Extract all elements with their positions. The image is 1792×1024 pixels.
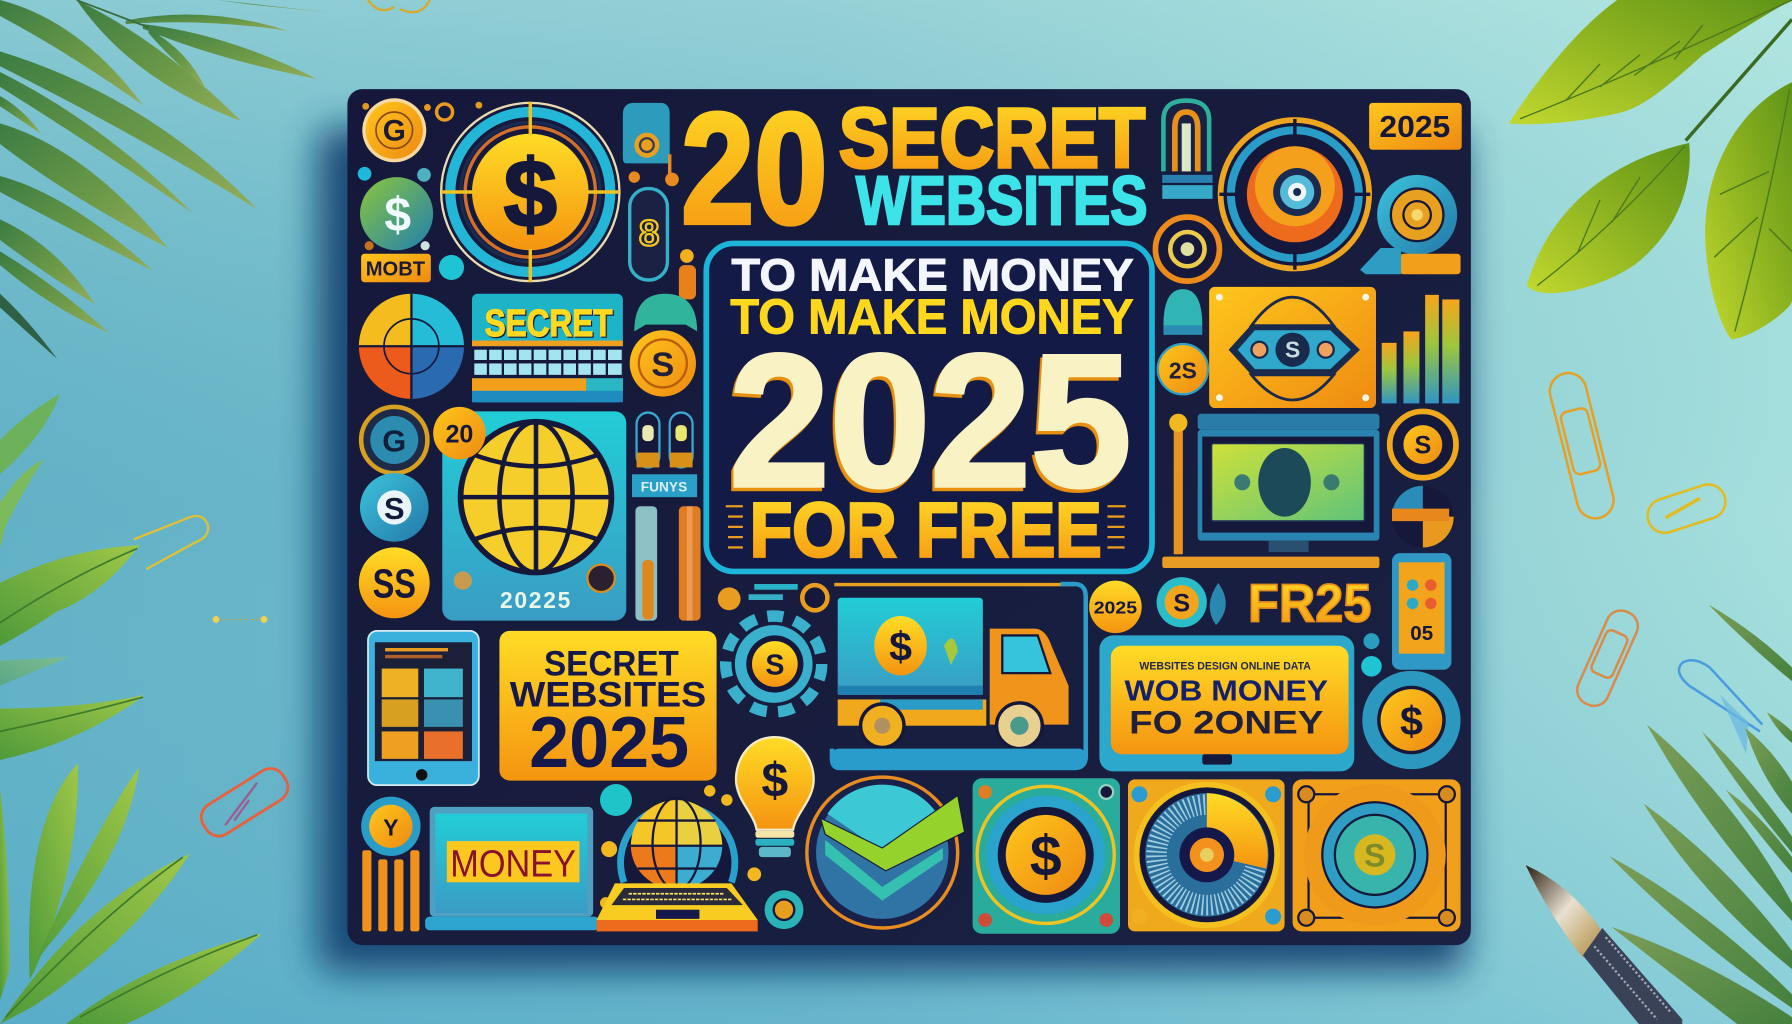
square dial: orange (1293, 779, 1461, 931)
teal dot (439, 255, 464, 280)
truck coin (874, 616, 927, 675)
phone (1392, 553, 1451, 670)
tag: MOBT: MOBT (366, 257, 426, 280)
palm leaves bottom right (1609, 605, 1792, 1024)
teal dot bottom (600, 784, 632, 816)
card: secret websites 2025 (499, 631, 717, 783)
globe icon (461, 422, 611, 573)
globe laptop (597, 798, 758, 931)
year 2025: 2025 (729, 315, 1131, 526)
laptop: money (425, 807, 599, 930)
palm leaves top left (0, 0, 330, 359)
coin: big blue dollar (1362, 671, 1461, 769)
laptop with yellow money screen (1099, 635, 1354, 771)
label: SECRET: SECRET (485, 302, 613, 344)
coin: spiral right: S (1414, 432, 1431, 460)
pen (1526, 865, 1682, 1024)
small gold dots (600, 785, 761, 909)
yellow laptop (597, 883, 758, 920)
keyboard keys (474, 350, 622, 375)
leaves lower left (0, 394, 262, 1024)
pill with 8 glyph (630, 189, 667, 280)
label: FO 2ONEY: FO 2ONEY (1129, 705, 1323, 741)
coin: G top left (362, 98, 426, 162)
coin: green dollar (360, 177, 433, 250)
label: 20225: 20225 (500, 587, 572, 613)
label: MONEY: MONEY (450, 843, 576, 885)
for free decorative dashes (726, 506, 1126, 547)
target right (1219, 119, 1370, 270)
coin: 2025 small (1089, 581, 1142, 633)
coin: blue concentric (1377, 175, 1457, 255)
teal dome icon and small coin (1158, 289, 1208, 394)
teal dome icon and small coin: 2S (1169, 357, 1197, 383)
teal dots right (1361, 633, 1382, 677)
label: WOB MONEY: WOB MONEY (1125, 676, 1328, 708)
for free: FOR FREE (750, 489, 1102, 574)
truck (832, 584, 1086, 768)
truck box (838, 598, 983, 695)
label: WEBSITES: WEBSITES (510, 674, 706, 714)
capsules and tag (632, 413, 697, 497)
card: SECRET keyboard (472, 294, 623, 402)
truck cab (990, 629, 1069, 725)
panel shadow (318, 128, 1465, 971)
green leaves top right (1509, 0, 1792, 339)
heading: to make money white: TO MAKE MONEY (731, 249, 1134, 300)
title: 20: 20 (681, 81, 827, 257)
money band (447, 841, 579, 882)
square dial: radial (1128, 779, 1285, 931)
target with dollar coin: $ (504, 140, 557, 247)
coin: dark blue orange (1392, 486, 1454, 547)
coin: blue rim tree: Y (383, 814, 398, 840)
helmet with coin (630, 294, 697, 397)
lamp post (1169, 414, 1187, 554)
coin: 2025 small: 2025 (1094, 598, 1138, 618)
gold plate with blue badge: S (1285, 337, 1300, 363)
monitor with banknote (1198, 414, 1379, 552)
coin: S blue: S (384, 491, 405, 526)
truck chassis (838, 699, 986, 726)
coin: S small: S (1173, 589, 1190, 617)
globe with green envelope (807, 777, 965, 928)
pie chart (359, 294, 464, 399)
gear with coin (726, 616, 822, 712)
desk bar (1162, 557, 1379, 568)
coin: spiral right (1390, 411, 1456, 478)
card: globe (442, 411, 626, 621)
square dial: orange: S (1364, 837, 1386, 873)
gear with coin: S (765, 649, 784, 681)
phone: 05 (1410, 622, 1433, 645)
label: 2025: 2025 (529, 703, 689, 783)
capsules and tag: FUNYS (641, 479, 687, 494)
coin: G top left: G (383, 115, 406, 148)
coin: G teal: G (382, 423, 406, 458)
bar chart (1382, 295, 1459, 403)
central panel: headline box (706, 243, 1152, 574)
coin: 20 (433, 407, 486, 459)
title: SECRET: SECRET (839, 90, 1145, 185)
small hardware strip (718, 583, 1074, 610)
tag: 2025: 2025 (1379, 109, 1450, 144)
label: SECRET: SECRET (544, 643, 679, 683)
icon: orange lock (679, 249, 696, 299)
tablet (368, 631, 479, 785)
coin: orange ring left (1155, 217, 1219, 281)
coin: green dollar: $ (384, 189, 411, 242)
gold plate with blue badge (1209, 287, 1376, 408)
label: FR25: FR25 (1248, 574, 1371, 634)
truck wheels (861, 703, 1042, 749)
vertical bars (635, 506, 701, 621)
coin: big blue dollar: $ (1400, 698, 1423, 744)
small line of text: WEBSITES DESIGN ONLINE DATA (1139, 661, 1311, 673)
icon: blue device with spiral (623, 103, 679, 186)
coin: blue rim tree (361, 797, 421, 856)
truck coin: $ (889, 624, 912, 670)
coin: S blue (360, 473, 429, 542)
coin: SS (359, 547, 430, 618)
pen-like bar (1360, 248, 1461, 274)
coin: S small (1157, 577, 1207, 627)
banknote (1211, 443, 1365, 521)
paper clips right (1546, 369, 1762, 754)
small teal coin (765, 890, 803, 929)
target with dollar coin (441, 102, 619, 282)
coin: SS: SS (373, 561, 416, 607)
square coin: teal (973, 778, 1120, 934)
main dark panel (347, 89, 1471, 945)
squiggle icon (1210, 583, 1226, 625)
title: WEBSITES: WEBSITES (856, 162, 1147, 239)
coin: 20: 20 (445, 420, 473, 448)
tablet tiles (382, 669, 463, 759)
tag: 2025 (1369, 103, 1462, 150)
lightbulb with dollar (736, 737, 814, 857)
lightbulb with dollar: $ (762, 755, 789, 808)
orange stripes (362, 850, 419, 931)
heading: to make money yellow: TO MAKE MONEY (730, 291, 1134, 345)
globe (631, 798, 722, 889)
small decorative icons top left (358, 102, 482, 250)
arch icon (1162, 101, 1213, 199)
pill with 8 glyph: 8 (639, 213, 659, 254)
helmet with coin: S (651, 346, 674, 384)
coin: G teal (361, 407, 427, 473)
square coin: teal: $ (1030, 824, 1062, 888)
paper clips left (134, 0, 430, 842)
tag: MOBT (361, 254, 431, 282)
